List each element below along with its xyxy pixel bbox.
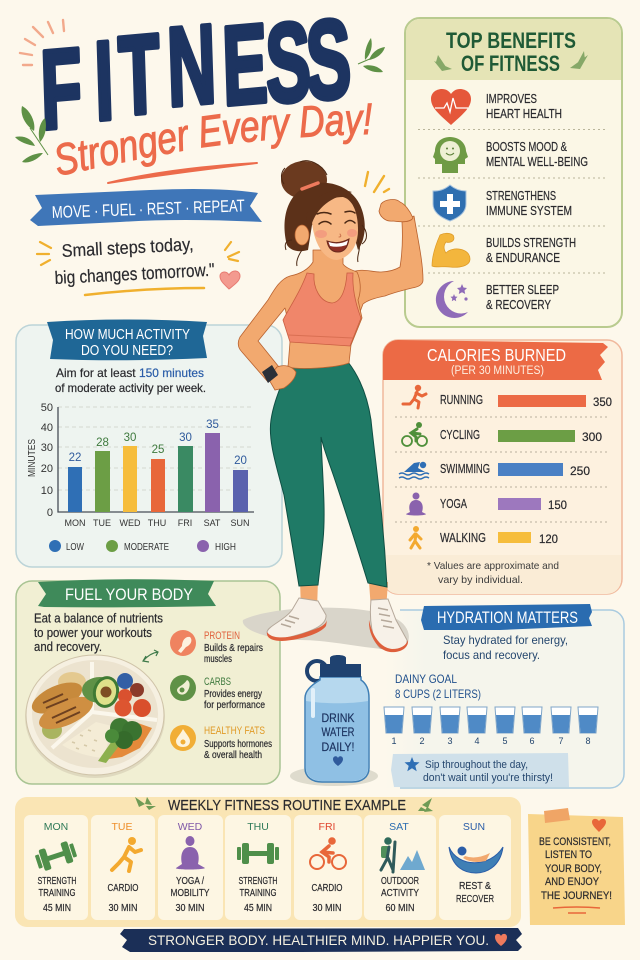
card: tuesday: 30 MIN [108,903,138,914]
cups row: 2 [419,736,425,746]
benefit: mood [433,137,588,173]
bar chart: 40 [41,422,53,434]
panel: weekly routine [15,797,521,927]
hydration intro: Stay hydrated for energy, [443,633,568,647]
card: sunday: RECOVER [456,893,494,905]
card: thursday: 45 MIN [244,903,272,914]
cups row: 1 [391,736,397,746]
panel: fuel your body [16,579,280,784]
card: monday: TRAINING [38,887,76,899]
row: running [403,385,612,409]
row: running: 350 [593,395,612,409]
chart legend: MODERATE [124,541,169,553]
calories heading: CALORIES BURNED [427,345,566,365]
card: sunday: REST & [459,880,491,892]
bar chart: 0 [47,507,53,519]
nutrient: healthy fats [170,725,272,761]
bar chart [27,402,254,528]
hydration banner [421,604,592,630]
fuel banner: FUEL YOUR BODY [65,585,193,604]
activity intro: Aim for at least 150 minutes [56,366,204,380]
bar chart: THU [148,518,166,528]
plate of food [25,655,165,778]
activity intro [55,366,206,395]
nutrient: protein: muscles [204,654,232,665]
bar chart: SAT [204,518,221,528]
benefit: sleep [436,281,559,318]
note text: THE JOURNEY! [541,890,612,902]
quote [54,234,215,295]
icon: title sparks [20,20,64,65]
benefit: heart health: IMPROVES [486,92,537,106]
scrunchie [302,183,318,189]
row: swimming [399,461,590,479]
subtitle underline [108,163,257,183]
water bottle: DRINK [322,711,354,725]
benefit: strength: & ENDURANCE [486,251,560,265]
nutrient: carbs: CARBS [204,676,231,688]
ankles [300,580,388,610]
icon: quote sparks [37,242,239,265]
row: yoga: YOGA [440,496,467,511]
nutrient: carbs [170,675,265,711]
water bottle: DAILY! [322,740,354,754]
calories heading [427,345,566,377]
bun [281,161,327,199]
activity banner [47,320,207,360]
note text: BE CONSISTENT, [539,836,611,848]
icon: quote heart [220,271,240,289]
benefit: strength [432,233,576,267]
cups row: 7 [558,736,564,746]
card: monday: MON [44,821,68,833]
ribbon: move fuel rest repeat: MOVE · FUEL · REST · REPEAT [51,196,245,222]
icon: left leaves [15,106,48,162]
chart legend: HIGH [215,541,236,553]
activity intro: of moderate activity per week. [55,381,206,395]
mouth [327,239,349,252]
right shoe [369,599,408,652]
bar chart: MINUTES [27,439,38,477]
row: cycling: CYCLING [440,427,480,442]
card: sunday: SUN [463,821,485,833]
bar chart: WED [120,518,141,528]
benefit: mood: BOOSTS MOOD & [486,140,568,154]
bar chart: SUN [230,518,250,528]
footer banner: STRONGER BODY. HEALTHIER MIND. HAPPIER YOU. [148,932,489,948]
benefit: strength: BUILDS STRENGTH [486,236,576,250]
nutrient: healthy fats: HEALTHY FATS [204,725,265,737]
weekly heading: WEEKLY FITNESS ROUTINE EXAMPLE [168,797,406,814]
benefit: heart health: HEART HEALTH [486,107,562,121]
card: monday: 45 MIN [43,903,71,914]
panel: top benefits [405,18,622,327]
bar chart: 28 [96,437,109,449]
nutrient: protein [170,630,263,665]
sticky note [528,808,625,925]
fuel banner [38,579,216,607]
icon: heading leaves [434,51,588,71]
benefit dividers [418,130,606,273]
calories footnote [427,560,559,586]
card: thursday: STRENGTH [238,875,278,887]
cups row: 6 [529,736,535,746]
benefits heading [446,28,576,76]
hydration tip: don't wait until you're thirsty! [423,772,553,784]
hair wisps [281,161,366,266]
water bottle [290,655,378,786]
chart legend: LOW [66,541,84,553]
hydration intro: focus and recovery. [443,648,540,662]
activity banner: HOW MUCH ACTIVITY [65,326,190,343]
card: friday: CARDIO [312,882,342,894]
hand on hip [268,366,296,390]
card: wednesday: YOGA / [176,875,204,887]
bar chart: 20 [234,455,247,467]
card: thursday: TRAINING [240,887,276,899]
quote: Small steps today, [61,234,194,261]
icon: arrow [143,650,158,662]
bar chart: 22 [69,452,81,464]
calories footnote: * Values are approximate and [427,560,559,572]
row: cycling [402,422,602,446]
row: yoga: 150 [548,498,567,512]
face [312,197,358,260]
card: sunday [449,821,503,905]
watch [262,365,278,383]
chart legend [49,540,236,553]
bar chart: 30 [179,432,192,444]
bar chart: 20 [41,463,53,475]
ribbon: move fuel rest repeat [30,189,262,226]
card: tuesday: TUE [112,821,132,833]
nutrient: protein: PROTEIN [204,630,240,642]
day cards [24,815,511,920]
nutrient: healthy fats: & overall health [204,750,262,761]
icon: footer heart [495,934,507,946]
nutrient: healthy fats: Supports hormones [204,739,272,750]
fuel intro: Eat a balance of nutrients [34,612,163,626]
card: saturday: OUTDOOR [381,875,419,887]
bar chart: 30 [41,442,53,454]
benefit: immune [433,185,572,221]
row: swimming: 250 [570,464,590,478]
facial features [317,211,355,237]
benefit: sleep: BETTER SLEEP [486,283,559,297]
tape [544,808,570,823]
nutrient: protein: Builds & repairs [204,643,263,654]
ear [295,225,309,245]
bar chart: 30 [124,432,136,444]
card: thursday: THU [247,821,269,833]
bar chart: TUE [93,518,111,528]
cups row: 4 [474,736,480,746]
row: cycling: 300 [582,430,602,444]
daily goal [395,672,481,701]
row: walking: 120 [539,532,558,546]
card: friday: FRI [319,821,335,833]
benefit: heart health [431,89,562,125]
hydration tip [391,753,569,787]
card: saturday: SAT [389,821,409,833]
icon: right leaves [358,38,385,72]
benefit: immune: STRENGTHENS [486,189,556,203]
icon: note heart [592,819,606,832]
bar chart: 10 [41,485,53,497]
card: monday [34,821,78,914]
bar chart: 50 [41,402,53,414]
card: wednesday: 30 MIN [176,903,204,914]
note text: LISTEN TO [545,849,592,861]
leggings [270,362,387,587]
row: walking [410,526,558,548]
row: walking: WALKING [440,530,486,545]
card: saturday [381,821,425,914]
cups row: 8 [585,736,591,746]
hydration tip: Sip throughout the day, [425,759,528,771]
card: monday: STRENGTH [38,875,76,887]
icon: flex sparks [365,172,389,192]
calories heading: (PER 30 MINUTES) [451,365,544,377]
torso and left arm [238,250,362,382]
row: yoga [406,492,567,516]
benefit: sleep: & RECOVERY [486,298,552,312]
cups row: 3 [447,736,453,746]
hair [285,183,365,251]
cups row: 5 [502,736,508,746]
subtitle: Stronger Every Day! [56,103,372,175]
card: wednesday: MOBILITY [170,887,210,899]
benefits heading: OF FITNESS [461,51,560,76]
benefits heading: TOP BENEFITS [446,28,576,53]
nutrient: carbs: for performance [204,700,265,711]
quote: big changes tomorrow." [54,260,215,288]
footer banner [120,928,522,952]
nutrient: carbs: Provides energy [204,689,262,700]
bar chart: 35 [206,419,219,431]
cups row [384,707,598,746]
card: wednesday [170,821,210,914]
fuel intro [34,612,163,654]
card: saturday: 60 MIN [386,903,414,914]
hydration intro [443,633,568,662]
fist [379,200,413,222]
icon: heading leaves [135,797,433,812]
calories footnote: vary by individual. [438,574,523,586]
hydration banner: HYDRATION MATTERS [437,608,578,627]
note text: YOUR BODY, [545,863,602,875]
card: thursday [237,821,279,914]
figure: woman flexing [238,161,423,652]
water bottle: WATER [322,725,355,739]
row: running: RUNNING [440,392,483,407]
daily goal: 8 CUPS (2 LITERS) [395,687,481,701]
fuel intro: to power your workouts [34,626,152,640]
panel: activity [16,320,282,567]
panel: calories burned [383,340,622,594]
card: tuesday [108,821,141,914]
daily goal: DAINY GOAL [395,672,457,686]
flexed arm [350,216,423,317]
calorie dividers [395,417,610,522]
card: friday [310,821,346,914]
benefit: immune: IMMUNE SYSTEM [486,204,572,218]
card: saturday: ACTIVITY [381,887,419,899]
hair fringe [306,190,352,232]
ground shadow [243,608,409,650]
fuel intro: and recovery. [34,640,102,654]
left shoe [267,598,327,641]
bar chart: MON [64,518,86,528]
card: friday: 30 MIN [312,903,342,914]
sports top [283,273,361,346]
note text: AND ENJOY [545,876,600,888]
card: tuesday: CARDIO [108,882,138,894]
bar chart: 25 [152,444,164,456]
panel: hydration [384,604,624,788]
note text [539,836,612,902]
activity banner: DO YOU NEED? [81,342,173,359]
benefit: mood: MENTAL WELL-BEING [486,155,588,169]
card: wednesday: WED [178,821,203,833]
bar chart: FRI [178,518,192,528]
row: swimming: SWIMMING [440,461,490,476]
